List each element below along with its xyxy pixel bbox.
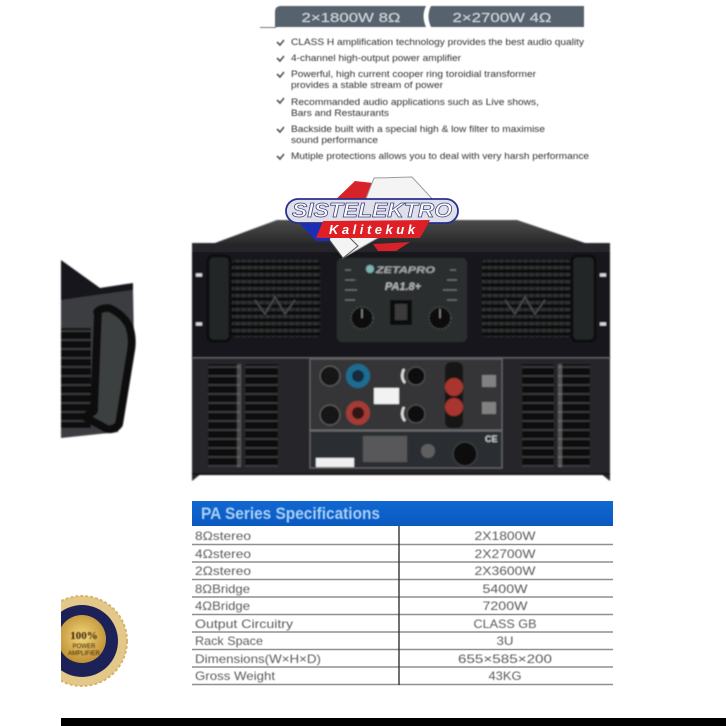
- row: rack space: [195, 634, 514, 648]
- chassis front: [192, 243, 610, 358]
- breaker: [421, 444, 435, 458]
- seal outer ring: [61, 595, 128, 687]
- logo name: SISTELEKTRO: [292, 200, 452, 222]
- seal text: AMPLIFIER: [68, 651, 100, 657]
- row: output circuitry: [195, 617, 536, 631]
- row: gross weight: 43KG: [488, 669, 522, 683]
- red arrow: [330, 181, 382, 212]
- left grille: [232, 260, 320, 337]
- side handle: [85, 308, 132, 429]
- row: 8 ohm stereo: 8Ωstereo: [195, 529, 251, 543]
- quality seal badge: [61, 595, 128, 687]
- seal text: POWER: [73, 644, 96, 650]
- row: gross weight: [195, 669, 522, 683]
- CE mark: CE: [485, 434, 498, 444]
- side view of amplifier handle: [61, 260, 134, 438]
- red connector: [346, 401, 370, 425]
- side chassis face: [61, 290, 134, 438]
- row: 4 ohm stereo: 2X2700W: [474, 547, 536, 561]
- rating: 4 ohm: 2×2700W 4Ω: [452, 10, 552, 25]
- chassis top: [215, 220, 585, 243]
- row: gross weight: Gross Weight: [195, 669, 276, 683]
- table heading: [192, 501, 613, 526]
- feature 3: Powerful, high current cooper ring toroidial transformer: [291, 69, 536, 79]
- row: 2 ohm stereo: [195, 564, 536, 578]
- feature 4: Recommanded audio applications such as Live shows,: [291, 97, 539, 107]
- amplifier front view: [192, 220, 610, 358]
- row: 2 ohm stereo: 2Ωstereo: [195, 564, 251, 578]
- white label: [374, 388, 399, 404]
- row: 8 ohm bridge: 5400W: [482, 582, 528, 596]
- row: rack space: 3U: [496, 634, 514, 648]
- row: output circuitry: CLASS GB: [474, 617, 536, 631]
- row: 4 ohm bridge: 7200W: [482, 599, 528, 613]
- feature 3 continued: provides a stable stream of power: [291, 80, 443, 90]
- channel A knob: [351, 307, 373, 329]
- feature 4 continued: Bars and Restaurants: [291, 108, 390, 118]
- feature list: [277, 37, 589, 161]
- row: 8 ohm bridge: [195, 582, 528, 596]
- red banner: [316, 220, 430, 238]
- row: dimensions: Dimensions(W×H×D): [195, 652, 321, 666]
- row: output circuitry: Output Circuitry: [195, 617, 293, 631]
- watermark logo: [286, 177, 458, 258]
- power inlet: [453, 442, 477, 466]
- warning label: [363, 436, 407, 462]
- feature 6: Mutiple protections allows you to deal with very harsh performance: [291, 151, 589, 161]
- right grille: [482, 260, 570, 337]
- row: 8 ohm stereo: [195, 529, 536, 543]
- seal navy ring: [61, 605, 118, 677]
- row: 2 ohm stereo: 2X3600W: [474, 564, 536, 578]
- lower red arrow: [373, 242, 410, 251]
- row: dimensions: 655×585×200: [458, 652, 552, 666]
- row: 8 ohm bridge: 8ΩBridge: [195, 582, 250, 596]
- left vents: [208, 364, 278, 467]
- row: dimensions: [195, 652, 552, 666]
- white diamond: [343, 177, 437, 258]
- blue wedge: [298, 222, 330, 241]
- right vents: [522, 364, 590, 467]
- checkmarks: [277, 40, 284, 159]
- feature 1: CLASS H amplification technology provides the best audio quality: [291, 37, 585, 47]
- row: 4 ohm stereo: 4Ωstereo: [195, 547, 251, 561]
- row: 4 ohm bridge: 4ΩBridge: [195, 599, 250, 613]
- side grille: [61, 328, 91, 428]
- XLR input 1: [320, 366, 340, 386]
- binding posts: [445, 362, 463, 428]
- lower power panel: [310, 431, 502, 468]
- row: 8 ohm stereo: 2X1800W: [474, 529, 536, 543]
- seal text: [68, 630, 100, 657]
- seal gold centre: [58, 615, 106, 663]
- panel model labels: ZETAPRO: [375, 265, 435, 275]
- bottom black bar: [61, 718, 726, 726]
- serial sticker: [316, 458, 354, 467]
- rear chassis: [192, 358, 610, 481]
- row: 4 ohm stereo: [195, 547, 536, 561]
- left handle: [208, 256, 230, 341]
- speaker output 1: [402, 367, 425, 385]
- feature 5: Backside built with a special high & low filter to maximise: [291, 124, 545, 134]
- panel brand mark: [366, 265, 374, 273]
- table heading: PA Series Specifications: [201, 505, 380, 523]
- channel B knob: [429, 307, 451, 329]
- blue connector: [346, 364, 370, 388]
- rating: 8 ohm: 2×1800W 8Ω: [302, 10, 401, 25]
- XLR input 2: [320, 405, 340, 425]
- row: rack space: Rack Space: [195, 634, 263, 648]
- panel model labels: [375, 265, 435, 293]
- feature 2: 4-channel high-output power amplifier: [291, 53, 461, 63]
- centre control panel: [337, 258, 467, 342]
- seal text: 100%: [70, 630, 98, 642]
- table grid: [192, 526, 613, 685]
- panel model labels: PA1.8+: [385, 281, 422, 293]
- red banner: Kalitekuk: [329, 222, 416, 237]
- output diagrams: [482, 375, 496, 414]
- feature 5 continued: sound performance: [291, 135, 378, 145]
- specifications table: [192, 501, 613, 685]
- rack holes: [196, 275, 606, 324]
- header: power ratings bar: [260, 6, 584, 28]
- power switch: [390, 300, 412, 325]
- right handle: [572, 256, 595, 341]
- upper connector panel: [310, 359, 502, 430]
- row: 4 ohm bridge: [195, 599, 528, 613]
- table rows: [195, 529, 552, 683]
- panel indicators: [345, 270, 457, 300]
- speaker output 2: [402, 405, 425, 423]
- amplifier rear view: [192, 357, 610, 481]
- side chassis top: [61, 260, 133, 312]
